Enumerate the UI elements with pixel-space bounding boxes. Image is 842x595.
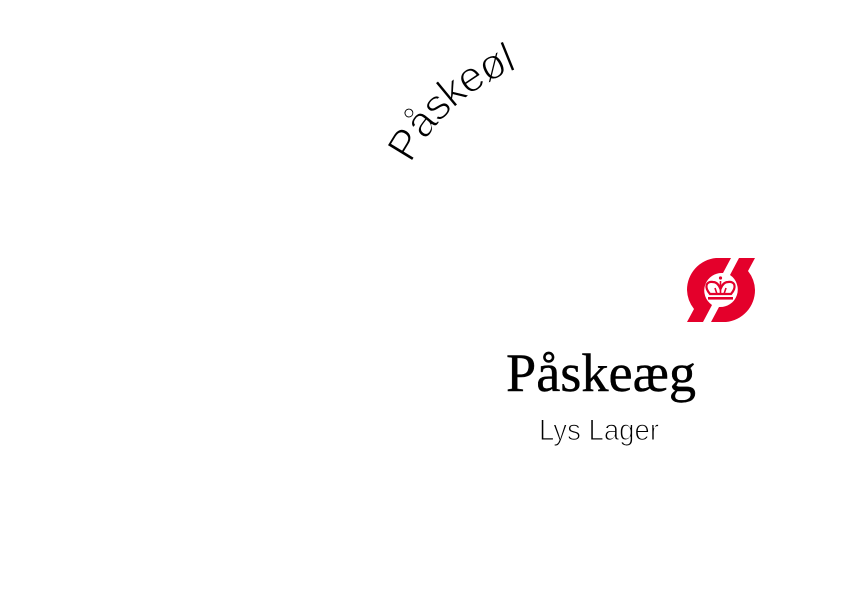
subtitle: Lys Lager: Lys Lager bbox=[539, 414, 659, 447]
icon: red Ø organic logo with crown bbox=[687, 258, 755, 322]
title: Påskeæg: Påskeæg bbox=[506, 343, 696, 403]
curved heading: Påskeøl: Påskeøl bbox=[388, 42, 514, 160]
